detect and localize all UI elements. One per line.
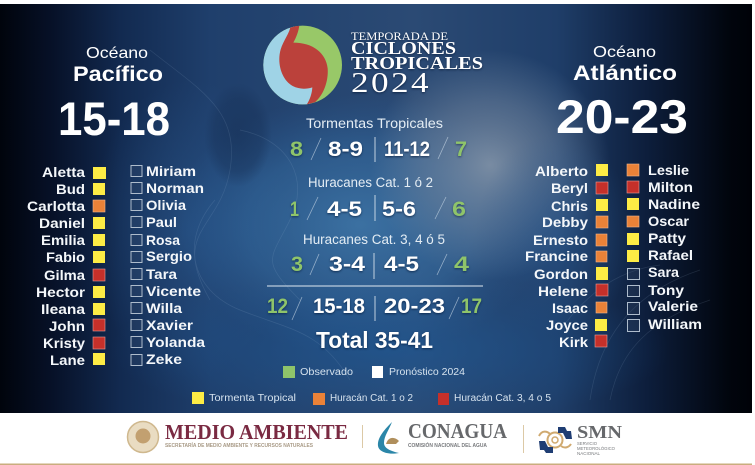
logo: SMN bbox=[539, 422, 622, 456]
logo: Conagua bbox=[378, 419, 508, 454]
logo: Conagua: COMISIÓN NACIONAL DEL AGUA bbox=[408, 441, 487, 449]
Pacific names: forecast: Miriam bbox=[146, 163, 196, 179]
Pacific names: observed: Bud bbox=[56, 181, 85, 197]
row: totals: 20-23 bbox=[384, 295, 445, 318]
Atlantic names: mixed second column: Tony bbox=[648, 282, 684, 298]
header: Océano Atlántico: Atlántico bbox=[573, 62, 677, 85]
divider bbox=[362, 425, 363, 448]
Pacific names: observed: Kristy bbox=[43, 335, 85, 351]
divider bbox=[523, 425, 524, 453]
Pacific names: forecast: Sergio bbox=[146, 248, 192, 264]
Pacific names: observed: Fabio bbox=[46, 249, 85, 265]
row: Huracanes Cat. 3, 4 ó 5: 3-4 bbox=[329, 253, 365, 276]
legend: categories bbox=[192, 392, 551, 405]
row: Tormentas Tropicales: 7 bbox=[455, 138, 467, 161]
Pacific names: forecast: Rosa bbox=[146, 232, 180, 248]
Pacific names: forecast: Olivia bbox=[146, 197, 186, 213]
Atlantic names: mixed second column: Sara bbox=[648, 264, 679, 280]
row: Huracanes Cat. 1 ó 2: 4-5 bbox=[327, 198, 362, 221]
Pacific names: observed: Hector bbox=[36, 284, 86, 300]
row: totals: 17 bbox=[461, 295, 482, 318]
header: Océano Pacífico bbox=[58, 45, 170, 145]
Pacific names: forecast: Willa bbox=[146, 300, 182, 316]
Pacific names: observed: Carlotta bbox=[27, 198, 85, 214]
row: totals: 15-18 bbox=[313, 295, 365, 318]
row: Huracanes Cat. 1 ó 2: Huracanes Cat. 1 ó 2 bbox=[308, 175, 433, 190]
row: Tormentas Tropicales: 11-12 bbox=[384, 138, 430, 161]
row: Huracanes Cat. 1 ó 2: 5-6 bbox=[382, 198, 416, 221]
title: TEMPORADA DE bbox=[351, 29, 448, 43]
row: Huracanes Cat. 1 ó 2: 1 bbox=[290, 198, 299, 221]
logo: SMN: METEOROLÓGICO bbox=[577, 445, 615, 451]
legend: observado / pronóstico: Observado bbox=[300, 367, 353, 378]
row: Tormentas Tropicales: 8 bbox=[290, 138, 303, 161]
Atlantic names: mixed second column: William bbox=[648, 316, 702, 332]
logo: SMN: SMN bbox=[577, 422, 622, 442]
Atlantic names: observed bbox=[525, 163, 608, 350]
Atlantic names: observed: Francine bbox=[525, 248, 588, 264]
Pacific names: forecast bbox=[131, 163, 205, 367]
logo: Medio Ambiente: SECRETARÍA DE MEDIO AMBIENTE Y RECURSOS NATURALES bbox=[165, 441, 314, 449]
legend: categories: Huracán Cat. 1 o 2 bbox=[330, 393, 413, 404]
Atlantic names: mixed second column: Nadine bbox=[648, 196, 700, 212]
Atlantic names: observed: Kirk bbox=[559, 334, 588, 350]
header: Océano Atlántico: Océano bbox=[593, 44, 656, 61]
Atlantic names: observed: Beryl bbox=[551, 180, 588, 196]
logo: Conagua: CONAGUA bbox=[408, 419, 508, 443]
row: Huracanes Cat. 1 ó 2 bbox=[290, 175, 466, 221]
Atlantic names: observed: Ernesto bbox=[533, 232, 588, 248]
Pacific names: forecast: Yolanda bbox=[146, 334, 205, 350]
Pacific names: forecast: Vicente bbox=[146, 283, 201, 299]
Pacific names: observed bbox=[27, 164, 106, 368]
Atlantic names: mixed second column: Oscar bbox=[648, 213, 690, 229]
header: Océano Pacífico: Océano bbox=[86, 45, 148, 62]
logo: SMN: SERVICIO bbox=[577, 441, 597, 446]
row: Huracanes Cat. 1 ó 2: 6 bbox=[452, 198, 466, 221]
header: Océano Pacífico: Pacífico bbox=[73, 63, 163, 86]
row: Huracanes Cat. 3, 4 ó 5: Huracanes Cat. 3, 4 ó 5 bbox=[303, 232, 445, 247]
title bbox=[351, 29, 483, 99]
row: Tormentas Tropicales bbox=[290, 116, 467, 162]
Atlantic names: mixed second column bbox=[627, 162, 702, 332]
row: Tormentas Tropicales: Tormentas Tropicales bbox=[306, 116, 443, 131]
Pacific names: observed: Daniel bbox=[39, 215, 85, 231]
logo: cyclone swirl bbox=[260, 23, 342, 107]
Atlantic names: mixed second column: Leslie bbox=[648, 162, 689, 178]
Atlantic names: observed: Helene bbox=[538, 283, 588, 299]
legend: observado / pronóstico: Pronóstico 2024 bbox=[389, 367, 465, 378]
Atlantic names: observed: Gordon bbox=[534, 266, 588, 282]
Pacific names: observed: Aletta bbox=[42, 164, 85, 180]
Pacific names: forecast: Paul bbox=[146, 214, 177, 230]
title: 2024 bbox=[351, 67, 431, 99]
row: totals: 12 bbox=[267, 295, 288, 318]
Pacific names: forecast: Tara bbox=[146, 266, 177, 282]
total 35-41: Total 35-41 bbox=[316, 327, 433, 353]
Atlantic names: observed: Debby bbox=[542, 214, 588, 230]
title: CICLONES bbox=[351, 38, 456, 58]
Pacific names: observed: Gilma bbox=[44, 267, 85, 283]
Atlantic names: mixed second column: Milton bbox=[648, 179, 693, 195]
logo: Medio Ambiente: MEDIO AMBIENTE bbox=[165, 420, 348, 444]
row: Huracanes Cat. 3, 4 ó 5: 4-5 bbox=[384, 253, 419, 276]
Pacific names: forecast: Norman bbox=[146, 180, 204, 196]
row: Huracanes Cat. 3, 4 ó 5: 3 bbox=[291, 253, 303, 276]
Atlantic names: mixed second column: Patty bbox=[648, 230, 686, 246]
legend: categories: Huracán Cat. 3, 4 o 5 bbox=[454, 393, 551, 404]
header: Océano Atlántico: 20-23 bbox=[556, 90, 688, 143]
legend: categories: Tormenta Tropical bbox=[209, 393, 296, 404]
Atlantic names: observed: Chris bbox=[551, 198, 588, 214]
legend: observado / pronóstico bbox=[283, 366, 465, 378]
Pacific names: observed: Lane bbox=[50, 352, 85, 368]
Atlantic names: observed: Joyce bbox=[546, 317, 588, 333]
row: Huracanes Cat. 3, 4 ó 5 bbox=[291, 232, 469, 279]
Pacific names: forecast: Zeke bbox=[146, 351, 182, 367]
row: totals bbox=[267, 295, 482, 321]
Pacific names: observed: Ileana bbox=[41, 301, 85, 317]
Atlantic names: observed: Alberto bbox=[535, 163, 588, 179]
header: Océano Pacífico: 15-18 bbox=[58, 92, 170, 145]
logo: Medio Ambiente bbox=[128, 420, 348, 452]
title: TROPICALES bbox=[351, 53, 483, 73]
Atlantic names: mixed second column: Rafael bbox=[648, 247, 693, 263]
Atlantic names: observed: Isaac bbox=[552, 300, 588, 316]
row: Huracanes Cat. 3, 4 ó 5: 4 bbox=[454, 253, 469, 276]
Atlantic names: mixed second column: Valerie bbox=[648, 298, 698, 314]
Pacific names: observed: John bbox=[49, 318, 85, 334]
logo: SMN: NACIONAL bbox=[577, 451, 600, 456]
row: Tormentas Tropicales: 8-9 bbox=[328, 138, 363, 161]
header: Océano Atlántico bbox=[556, 44, 688, 143]
Pacific names: observed: Emilia bbox=[41, 232, 85, 248]
Pacific names: forecast: Xavier bbox=[146, 317, 194, 333]
total divider line bbox=[267, 285, 483, 287]
